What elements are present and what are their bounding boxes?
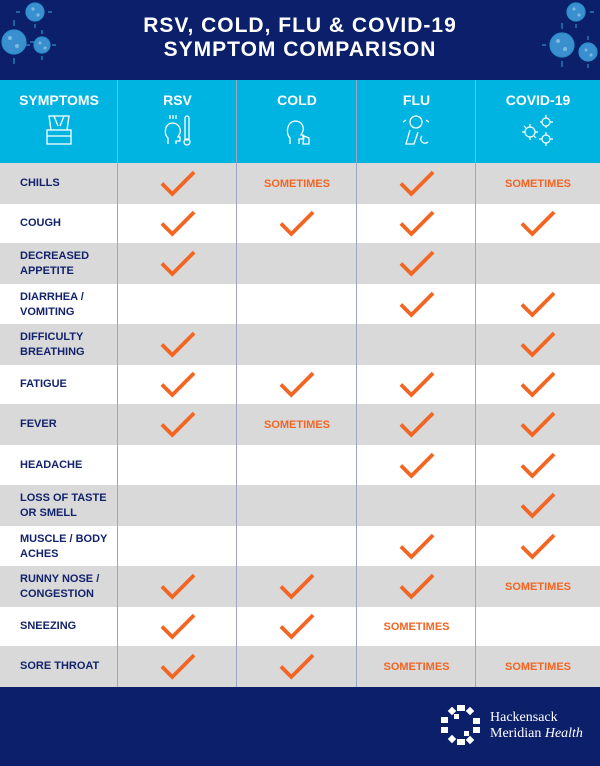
row: loss of taste: OR SMELL — [20, 506, 77, 518]
row: chills — [0, 163, 600, 204]
row: difficulty breathing — [0, 324, 600, 365]
row: chills: CHILLS — [20, 177, 60, 189]
row: loss of taste: LOSS OF TASTE — [20, 492, 107, 504]
row: fever: SOMETIMES — [264, 418, 330, 430]
row: diarrhea: VOMITING — [20, 306, 74, 318]
row: fever: FEVER — [20, 418, 57, 430]
row: sore throat: SOMETIMES — [505, 660, 571, 672]
row: decreased appetite: APPETITE — [20, 264, 74, 276]
icon: virus decoration left — [1, 2, 56, 64]
header: symptoms — [19, 92, 99, 145]
row: headache: HEADACHE — [20, 459, 82, 471]
row: runny nose: SOMETIMES — [505, 580, 571, 592]
column header row — [0, 80, 600, 163]
row: diarrhea — [20, 290, 556, 318]
row: fatigue — [20, 372, 556, 398]
header: symptoms: SYMPTOMS — [19, 92, 99, 108]
row: difficulty breathing: BREATHING — [20, 346, 85, 358]
row: fever — [0, 404, 600, 445]
header: RSV: RSV — [163, 92, 192, 108]
header: flu — [402, 92, 430, 145]
row: runny nose: RUNNY NOSE / — [20, 572, 99, 584]
row: difficulty breathing: DIFFICULTY — [20, 330, 83, 342]
logo: Hackensack Meridian Health — [441, 705, 583, 745]
row: sneezing — [20, 614, 450, 640]
header: cold — [277, 92, 317, 145]
title — [143, 14, 457, 61]
row: sore throat: SORE THROAT — [20, 660, 99, 672]
header: cold: COLD — [277, 92, 317, 108]
row: decreased appetite — [0, 243, 600, 284]
header: RSV — [163, 92, 192, 146]
row: loss of taste — [0, 485, 600, 526]
row: muscle aches: ACHES — [20, 548, 59, 560]
row: chills: SOMETIMES — [505, 178, 571, 190]
title: RSV, COLD, FLU & COVID-19 — [143, 14, 457, 37]
row: chills: SOMETIMES — [264, 178, 330, 190]
row: cough: COUGH — [20, 217, 61, 229]
row: runny nose — [0, 566, 600, 607]
table rows — [0, 163, 600, 687]
header banner — [0, 0, 600, 80]
row: decreased appetite: DECREASED — [20, 250, 89, 262]
row: runny nose: CONGESTION — [20, 588, 94, 600]
row: sneezing: SNEEZING — [20, 620, 76, 632]
footer — [0, 687, 600, 766]
row: muscle aches: MUSCLE / BODY — [20, 532, 107, 544]
row: sneezing: SOMETIMES — [383, 620, 450, 632]
icon: virus decoration right — [542, 2, 598, 68]
row: muscle aches — [20, 532, 556, 560]
row: headache — [20, 452, 556, 479]
title: SYMPTOM COMPARISON — [164, 38, 436, 61]
row: cough — [20, 210, 556, 237]
row: diarrhea: DIARRHEA / — [20, 290, 84, 302]
row: fatigue: FATIGUE — [20, 378, 67, 390]
header: flu: FLU — [403, 92, 430, 108]
logo: Hackensack Meridian Health: Meridian Health — [490, 726, 583, 741]
row: sore throat: SOMETIMES — [383, 660, 450, 672]
header: covid-19 — [506, 92, 570, 146]
logo: Hackensack Meridian Health: Hackensack — [490, 710, 558, 725]
header: covid-19: COVID-19 — [506, 92, 570, 108]
row: sore throat — [0, 646, 600, 687]
